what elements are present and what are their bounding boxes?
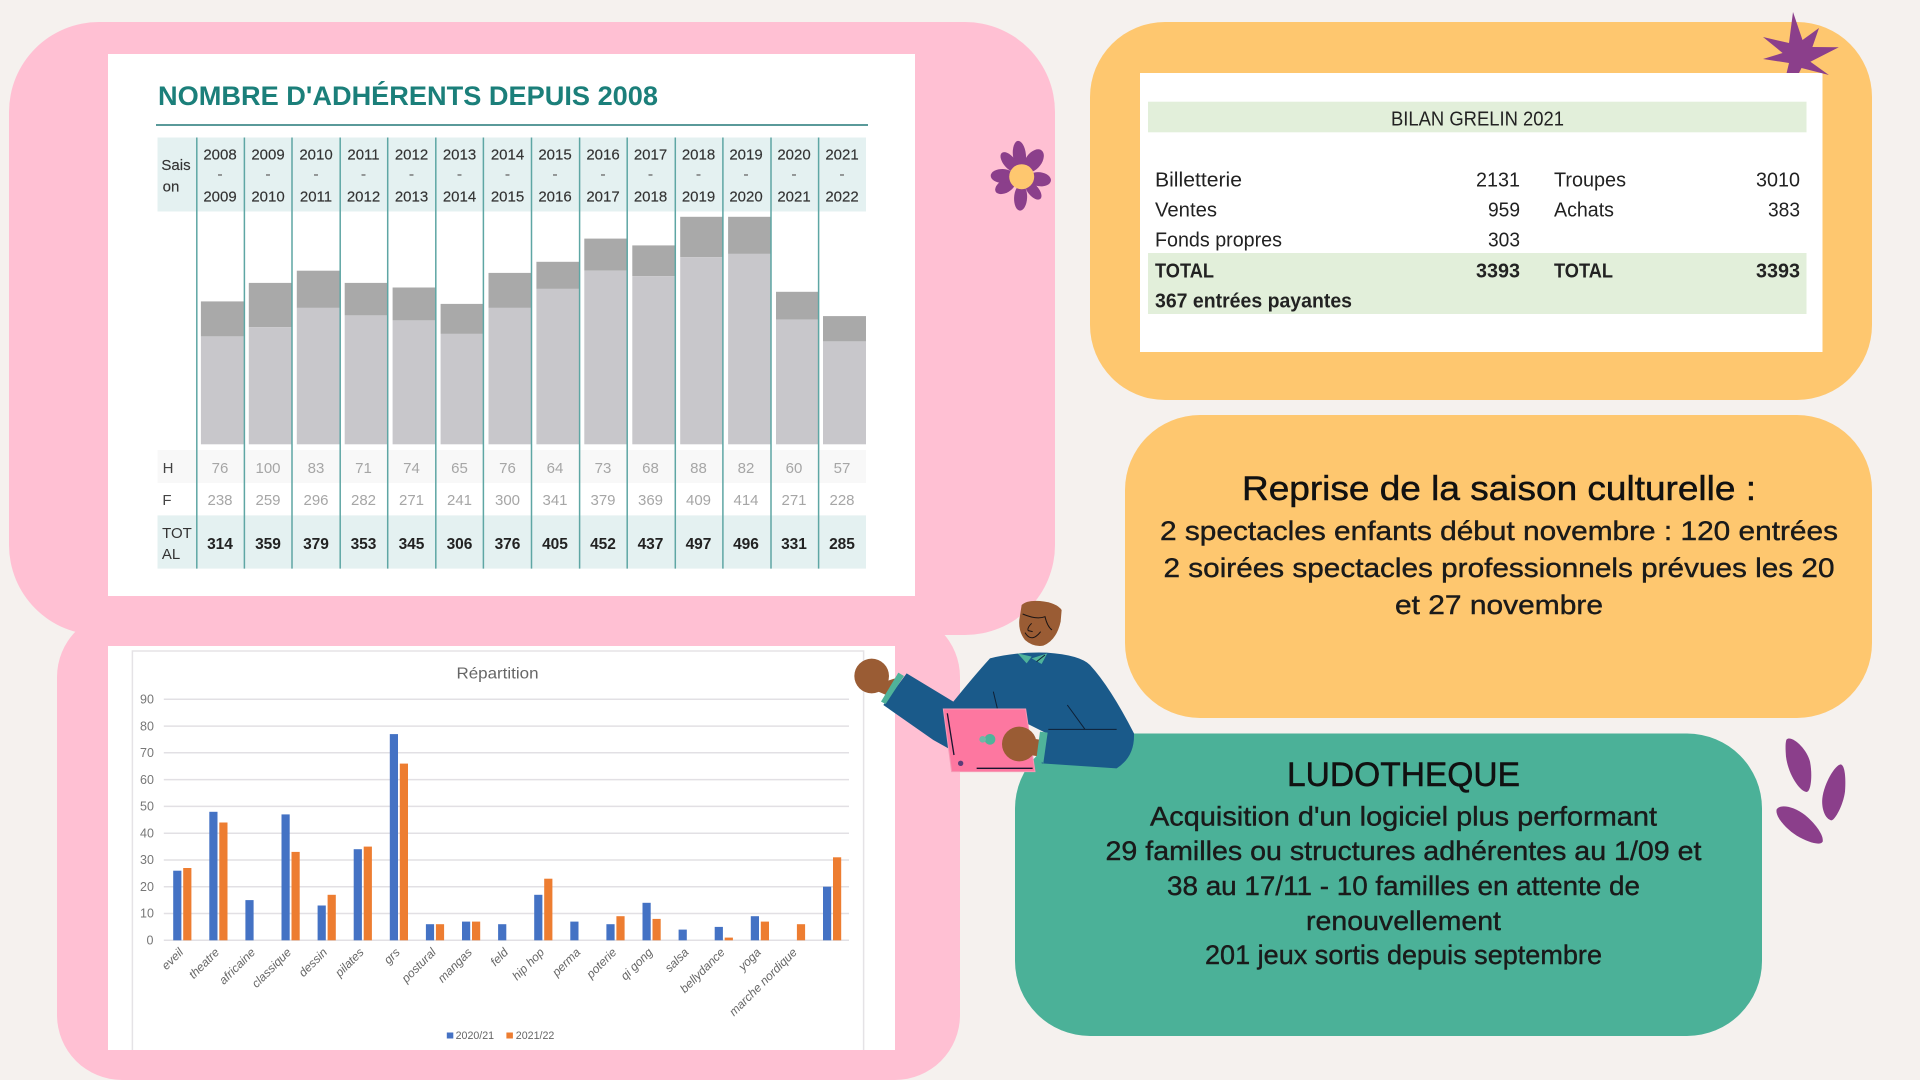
chart legend: 2020/21 — [456, 1030, 494, 1042]
table header years: 2017 — [586, 188, 620, 206]
table header years: - — [744, 166, 748, 183]
row: hommes: 83 — [308, 460, 324, 477]
icon: purple leaves — [1776, 738, 1845, 844]
row: total: TOT — [162, 525, 192, 542]
row: hommes: 60 — [786, 460, 802, 477]
row: femmes: 369 — [638, 492, 663, 509]
table header years: 2013 — [443, 146, 476, 164]
row: total: 306 — [447, 536, 473, 553]
x axis labels: bellydance — [677, 945, 728, 996]
table header years: 2009 — [251, 146, 285, 164]
row: total: 376 — [495, 536, 521, 553]
y axis labels: 0 — [147, 934, 154, 948]
table header years: 2014 — [443, 188, 476, 206]
table header years: - — [505, 166, 510, 183]
row: femmes — [162, 492, 855, 509]
row: total: 379 — [303, 536, 329, 553]
table header years: - — [696, 166, 701, 183]
table header years: 2019 — [682, 188, 715, 206]
y axis labels: 20 — [140, 880, 154, 894]
table header years: - — [266, 166, 270, 183]
x axis labels: qi gong — [618, 945, 656, 983]
table header years: - — [840, 166, 844, 183]
x axis labels: postural — [398, 945, 439, 986]
table header years: 2019 — [729, 146, 763, 164]
panel: members table card — [108, 54, 915, 596]
table header years: - — [314, 166, 318, 183]
text block: ludotheque details: 201 jeux sortis depuis septembre — [1205, 940, 1602, 970]
row: femmes: 271 — [781, 492, 807, 509]
row: hommes: 68 — [642, 460, 659, 477]
x axis labels: africaine — [216, 945, 258, 987]
table: bilan grelin: 959 — [1488, 200, 1520, 222]
right cuff — [1037, 732, 1048, 763]
x axis labels: salsa — [662, 945, 692, 975]
table header years: 2013 — [395, 188, 428, 206]
y axis labels: 10 — [140, 907, 154, 921]
table header years: 2015 — [491, 188, 524, 206]
text block: reprise details: et 27 novembre — [1395, 590, 1603, 620]
table header years: 2011 — [347, 146, 380, 164]
text block: ludotheque details: renouvellement — [1306, 906, 1502, 936]
panel: repartition chart card — [108, 646, 895, 1050]
table header years: 2020 — [729, 188, 763, 206]
y axis labels: 60 — [140, 773, 154, 787]
table header years: - — [648, 166, 653, 183]
text block: reprise details — [1160, 516, 1838, 620]
panel: bilan orange — [1090, 22, 1872, 400]
text block: ludotheque details — [1106, 802, 1702, 970]
panel: members chart background — [9, 22, 1055, 635]
table header years: 2016 — [586, 146, 620, 164]
row: hommes: 82 — [738, 460, 754, 477]
row: femmes: 414 — [733, 492, 759, 509]
text block: reprise details: 2 spectacles enfants début novembre : 120 entrées — [1160, 516, 1838, 546]
table: bilan grelin: 383 — [1768, 200, 1800, 222]
row: total: 331 — [781, 536, 807, 553]
table: bilan grelin: Fonds propres — [1155, 230, 1282, 252]
x axis labels: hip hop — [509, 945, 547, 983]
row: total: 285 — [829, 536, 855, 553]
table header years: 2010 — [251, 188, 285, 206]
left cuff — [881, 673, 904, 704]
table: bilan grelin — [1140, 73, 1822, 352]
table: bilan grelin: 3010 — [1756, 170, 1800, 192]
row: total: 359 — [255, 536, 281, 553]
table: bilan grelin: 367 entrées payantes — [1155, 290, 1352, 312]
row: hommes — [163, 460, 850, 477]
table header years: 2016 — [538, 188, 572, 206]
x axis labels: marche nordique — [726, 945, 800, 1019]
table header years: 2009 — [203, 188, 237, 206]
table header years: 2011 — [300, 188, 332, 206]
table header years: 2022 — [825, 188, 859, 206]
bar chart: 2020/21 series — [173, 734, 831, 940]
x axis labels: perma — [549, 945, 583, 980]
heading: ludotheque: LUDOTHEQUE — [1287, 756, 1520, 794]
table: bilan grelin: BILAN GRELIN 2021 — [1391, 108, 1564, 130]
y axis labels: 30 — [140, 853, 154, 867]
table: bilan grelin: TOTAL — [1155, 260, 1214, 282]
x axis labels: classique — [249, 945, 294, 990]
row: femmes: F — [162, 492, 172, 509]
text block: ludotheque details: 29 familles ou structures adhérentes au 1/09 et — [1106, 836, 1702, 866]
y axis labels — [140, 692, 154, 948]
table header years: - — [600, 166, 606, 183]
x axis labels: dessin — [296, 945, 330, 980]
table: bilan grelin: TOTAL — [1554, 260, 1613, 282]
row: hommes: 57 — [834, 460, 850, 477]
icon: purple flower — [990, 140, 1052, 211]
x axis labels: yoga — [735, 945, 764, 974]
table: bilan grelin: 2131 — [1476, 170, 1520, 192]
table header years: 2020 — [777, 146, 811, 164]
table header years: on — [163, 178, 179, 196]
y axis labels: 70 — [140, 746, 154, 760]
table header years: - — [552, 166, 558, 183]
right hand — [1002, 727, 1042, 761]
stacked bars — [201, 217, 866, 444]
text block: reprise details: 2 soirées spectacles professionnels prévues les 20 — [1164, 553, 1834, 583]
row: femmes: 300 — [495, 492, 520, 509]
table header years — [161, 146, 859, 206]
row: total: 497 — [686, 536, 711, 553]
table: bilan grelin: 3393 — [1476, 260, 1520, 282]
table header years: Sais — [161, 157, 191, 174]
table: bilan grelin: Billetterie — [1155, 170, 1242, 192]
table header years: 2014 — [491, 146, 524, 164]
heading: repartition chart title: Répartition — [456, 666, 538, 682]
table header years: 2018 — [634, 188, 667, 206]
row: femmes: 409 — [686, 492, 711, 509]
row: total: 496 — [733, 536, 759, 553]
y axis labels: 50 — [140, 800, 154, 814]
bar chart: 2021/22 series — [183, 764, 841, 940]
row: total: AL — [162, 546, 180, 563]
row: hommes: 64 — [547, 460, 563, 477]
tablet — [943, 709, 1035, 772]
icon: person holding tablet — [854, 601, 1134, 772]
chart legend — [447, 1030, 554, 1042]
row: total — [162, 525, 855, 563]
collar — [1018, 653, 1047, 664]
row: total: 314 — [207, 536, 233, 553]
table header years: 2017 — [634, 146, 667, 164]
panel: reprise de la saison culturelle — [1125, 415, 1872, 718]
table: bilan grelin: Troupes — [1554, 170, 1626, 192]
table header years: - — [409, 166, 414, 183]
row: total: 437 — [638, 536, 663, 553]
row: femmes: 271 — [399, 492, 424, 509]
row: total: 345 — [399, 536, 425, 553]
table: bilan grelin: 3393 — [1756, 260, 1800, 282]
y axis labels: 40 — [140, 826, 154, 840]
row: femmes: 238 — [207, 492, 233, 509]
x axis labels: feld — [487, 945, 511, 969]
left hand — [854, 659, 895, 697]
row: femmes: 282 — [351, 492, 376, 509]
x axis labels: grs — [381, 945, 403, 967]
row: hommes: 88 — [690, 460, 707, 477]
row: total: 405 — [542, 536, 568, 553]
x axis labels: mangas — [435, 945, 475, 985]
table: bilan grelin: Achats — [1554, 200, 1614, 222]
row: hommes: 76 — [212, 460, 228, 477]
sweater lines — [993, 655, 1117, 729]
table header years: 2018 — [682, 146, 715, 164]
text block: ludotheque details: 38 au 17/11 - 10 familles en attente de — [1167, 871, 1640, 901]
table: bilan grelin: 303 — [1488, 230, 1520, 252]
table header years: 2010 — [299, 146, 333, 164]
row: hommes: 65 — [451, 460, 468, 477]
table header years: 2012 — [395, 146, 428, 164]
table header years: - — [457, 166, 462, 183]
row: femmes: 341 — [542, 492, 568, 509]
x axis labels: theatre — [186, 945, 222, 982]
row: femmes: 228 — [829, 492, 855, 509]
x axis labels — [159, 945, 800, 1019]
row: femmes: 296 — [303, 492, 329, 509]
table header years: 2021 — [825, 146, 859, 164]
table header years: 2021 — [777, 188, 811, 206]
sweater — [883, 653, 1134, 768]
panel: repartition chart background — [57, 612, 960, 1080]
row: femmes: 259 — [255, 492, 281, 509]
y axis labels: 90 — [140, 692, 154, 706]
table header years: 2012 — [347, 188, 380, 206]
panel: ludotheque — [1015, 734, 1762, 1036]
y axis labels: 80 — [140, 719, 154, 733]
table header years: - — [792, 166, 796, 183]
row: femmes: 241 — [447, 492, 472, 509]
table header years: - — [361, 166, 366, 183]
heading: reprise: Reprise de la saison culturelle : — [1242, 470, 1756, 508]
heading: members title: NOMBRE D'ADHÉRENTS DEPUIS 2008 — [158, 80, 658, 111]
row: hommes: 73 — [595, 460, 611, 477]
row: total: 452 — [590, 536, 616, 553]
text block: ludotheque details: Acquisition d'un logiciel plus performant — [1150, 802, 1658, 832]
x axis labels: eveil — [159, 945, 186, 973]
row: hommes: H — [163, 460, 173, 477]
row: total: 353 — [351, 536, 377, 553]
table header years: 2008 — [203, 146, 237, 164]
row: hommes: 74 — [403, 460, 420, 477]
chart legend: 2021/22 — [516, 1030, 554, 1042]
facial lines — [1023, 614, 1052, 638]
table: bilan grelin: Ventes — [1155, 200, 1217, 222]
x axis labels: poterie — [583, 945, 620, 982]
row: hommes: 71 — [355, 460, 372, 477]
row: hommes: 100 — [255, 460, 281, 477]
row: hommes: 76 — [499, 460, 516, 477]
x axis labels: pilates — [331, 945, 367, 980]
head — [1019, 601, 1062, 646]
row: femmes: 379 — [590, 492, 616, 509]
table header years: - — [218, 166, 222, 183]
table header years: 2015 — [538, 146, 572, 164]
icon: purple star — [1763, 12, 1839, 75]
